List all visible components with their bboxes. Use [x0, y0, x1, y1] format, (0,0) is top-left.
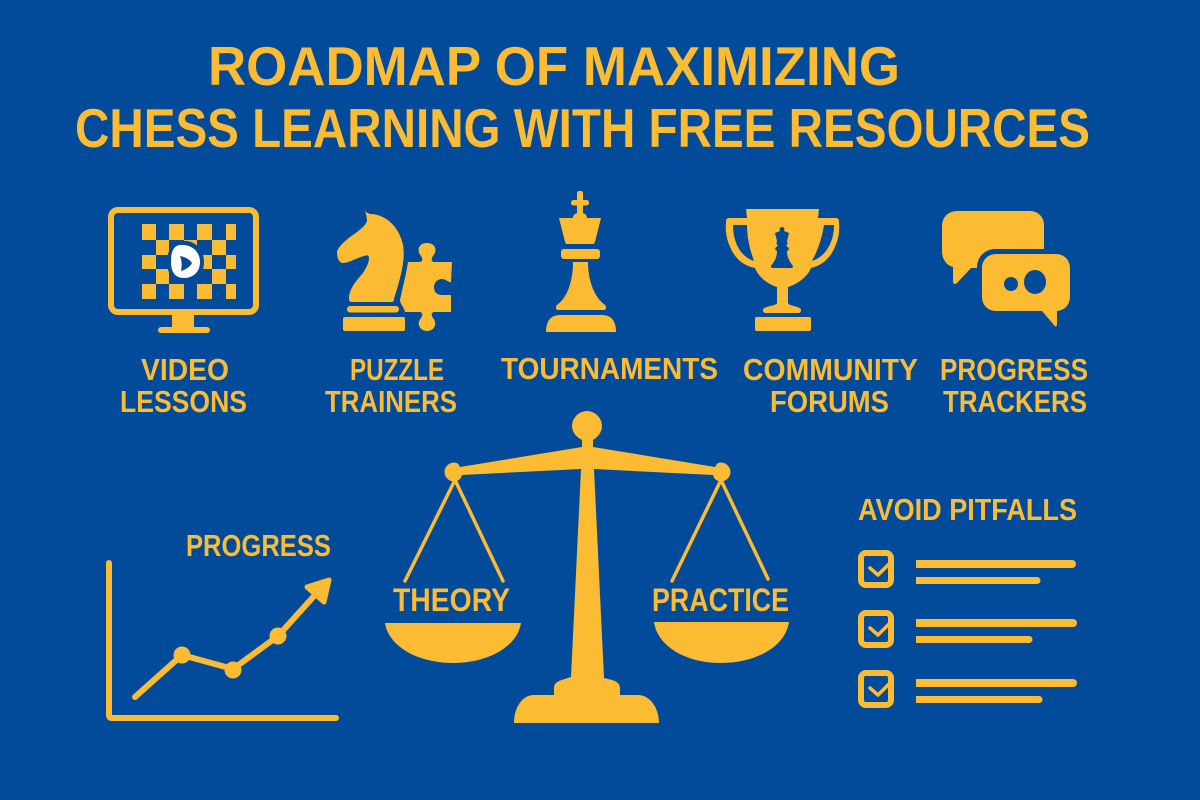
checklist item 3: [861, 673, 1077, 705]
label: progress trackers: PROGRESS: [940, 352, 1088, 387]
label: tournaments: TOURNAMENTS: [501, 351, 718, 386]
icon: trophy: [726, 209, 839, 331]
label: progress trackers: [940, 352, 1088, 419]
icon: chess king: [546, 191, 616, 332]
panel: puzzle trainers: [325, 211, 457, 419]
label: puzzle trainers: TRAINERS: [325, 384, 457, 419]
icon: speech bubbles: [942, 211, 1075, 326]
panel: avoid pitfalls checklist: [858, 492, 1077, 705]
panel: tournaments: [501, 191, 718, 386]
right pan: practice: PRACTICE: [652, 582, 789, 618]
icon: monitor with chessboard: [111, 210, 256, 333]
title: [75, 35, 1090, 159]
label: community forums: [743, 352, 918, 419]
label: video lessons: VIDEO: [141, 352, 229, 387]
label: puzzle trainers: [325, 352, 457, 419]
checklist item 1: [861, 553, 1076, 585]
icon: knight and puzzle piece: [337, 211, 452, 331]
label: community forums: COMMUNITY: [743, 352, 918, 387]
label: video lessons: LESSONS: [120, 384, 247, 419]
chart: rising line with arrow: [109, 563, 336, 718]
panel: balance scale: [385, 411, 789, 723]
title: ROADMAP OF MAXIMIZING: [208, 35, 900, 97]
heading: progress: PROGRESS: [186, 528, 331, 563]
label: progress trackers: TRACKERS: [943, 384, 1087, 419]
panel: community forums: [726, 209, 918, 419]
label: video lessons: [120, 352, 247, 419]
panel: progress trackers: [940, 211, 1088, 419]
left pan: theory: [385, 480, 521, 663]
left pan: theory: THEORY: [393, 582, 510, 618]
label: community forums: FORUMS: [770, 384, 889, 419]
label: puzzle trainers: PUZZLE: [350, 352, 444, 387]
heading: avoid pitfalls: AVOID PITFALLS: [858, 492, 1077, 527]
icon: scale stand and beam: [444, 411, 730, 723]
panel: video lessons: [111, 210, 256, 419]
panel: progress chart: [109, 528, 336, 718]
checklist item 2: [861, 613, 1077, 645]
right pan: practice: [652, 480, 789, 663]
